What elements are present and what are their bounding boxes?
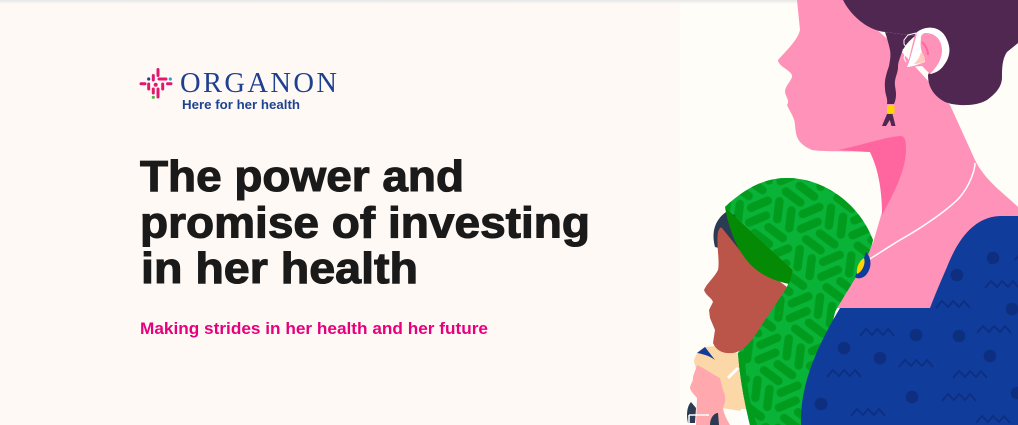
logo: Organon	[141, 68, 337, 112]
illustration: three women in profile	[687, 0, 1018, 425]
woman 2: scarf band	[725, 207, 793, 284]
woman 2: green headscarf	[725, 178, 873, 425]
garment zigzags	[827, 253, 1018, 423]
woman 1: earring outline	[903, 33, 916, 62]
icon: Organon cross mark	[141, 70, 172, 99]
necklace pendant	[855, 252, 870, 278]
subtitle: Making strides in her health and her future	[140, 319, 488, 338]
title: in her health	[141, 244, 418, 293]
woman 1: hair	[843, 0, 1018, 105]
woman 2: face	[704, 228, 787, 353]
woman 1: braid	[885, 32, 915, 104]
garment dots	[815, 252, 1018, 410]
woman 1: braid tail	[882, 114, 896, 126]
woman 2: dark hair	[714, 212, 740, 251]
logo wordmark: ORGANON	[180, 68, 337, 99]
title	[140, 152, 590, 293]
woman 1: braid tie	[887, 105, 894, 114]
woman 1: ear	[907, 28, 949, 74]
woman 1: pink face, neck and chest	[778, 0, 1018, 308]
woman 1: necklace	[868, 163, 975, 260]
logo tagline: Here for her health	[182, 97, 300, 112]
woman 3: small figure at the bottom	[687, 346, 750, 425]
woman 1: neck shadow	[838, 136, 906, 215]
woman 1: blue garment	[801, 216, 1018, 425]
title: The power and	[140, 152, 464, 201]
title: promise of investing	[140, 198, 590, 248]
